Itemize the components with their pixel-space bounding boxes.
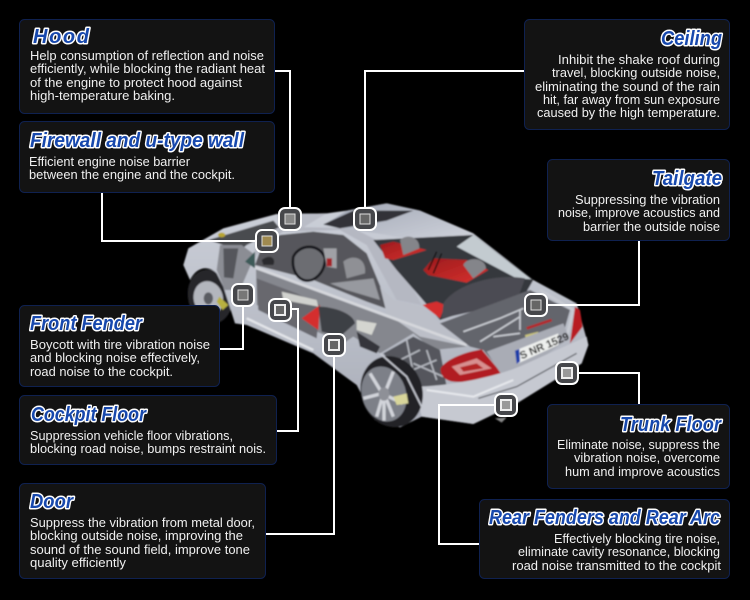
right tail light [570,307,583,343]
connector: rear fenders [439,405,495,544]
connector: tailgate [547,241,639,305]
text: tailgate description [558,192,720,234]
lower door [256,269,467,353]
text: door description: Suppress the vibration from metal door, [30,515,255,530]
text: ceiling description: travel, blocking outside noise, [552,65,720,80]
text: trunk floor description: Eliminate noise, suppress the [557,437,720,452]
text: ceiling description: eliminating the sound of the rain [535,79,720,94]
text: tailgate description: noise, improve acoustics and [558,205,720,220]
text: ceiling description: caused by the high temperature. [537,105,720,120]
text: hood description: Help consumption of reflection and noise [30,48,264,63]
text: firewall description [29,154,235,182]
text: hood description: high-temperature baking. [30,88,175,103]
text: ceiling description: hit, far away from sun exposure [543,92,720,107]
heading: hood: Hood [33,26,90,48]
text: cockpit floor description [30,428,266,456]
marker: firewall [256,230,278,252]
text: ceiling description [535,52,720,120]
text: tailgate description: barrier the outside noise [583,219,720,234]
panel: front fender [20,306,220,386]
marker: door [323,334,345,356]
text: firewall description: between the engine and the cockpit. [29,167,235,182]
windscreen frame [255,227,422,305]
text: door description: quality efficiently [30,555,126,570]
text: rear fenders description [512,531,721,573]
hood highlight [277,213,327,227]
connector: door [266,356,334,534]
text: trunk floor description [557,437,720,479]
text: trunk floor description: vibration noise, overcome [574,450,720,465]
license plate [515,333,558,364]
heading: rear fenders and rear arc: Rear Fenders and Rear Arc [489,507,720,529]
connector: cockpit floor [277,309,298,431]
text: tailgate description: Suppressing the vibration [575,192,720,207]
marker: tailgate [525,294,547,316]
text: cockpit floor description: blocking road noise, bumps restraint nois. [30,441,266,456]
connector: hood [275,71,290,208]
panel: tailgate [548,160,730,240]
text: ceiling description: Inhibit the shake roof during [558,52,720,67]
panel: door [20,484,266,578]
panel: ceiling [524,20,730,130]
text: rear fenders description: Effectively blocking tire noise, [554,531,720,546]
text: hood description: of the engine to protect hood against [30,75,242,90]
text: front fender description: and blocking noise effectively, [30,350,200,365]
panel: cockpit floor [20,396,276,464]
panel: rear fenders and rear arc [480,500,730,578]
heading: tailgate: Tailgate [652,168,722,190]
rear bumper [415,337,588,424]
text: front fender description: Boycott with tire vibration noise [30,337,210,352]
illustration: cutaway silver car: S NR 1529 [518,331,571,362]
heading: cockpit floor: Cockpit Floor [31,404,147,426]
text: rear fenders description: eliminate cavity resonance, blocking [518,544,720,559]
heading: ceiling: Ceiling [661,28,722,50]
heading: trunk floor: Trunk Floor [620,414,722,436]
marker: cockpit floor [269,299,291,321]
marker: rear fenders [495,394,517,416]
illustration: cutaway silver car [182,203,588,435]
car body shell [183,203,588,427]
sunroof [323,211,413,228]
connector: trunk floor [578,373,639,404]
text: firewall description: Efficient engine noise barrier [29,154,191,169]
connector: front fender [220,306,243,349]
exhaust tip [495,417,507,423]
heading: firewall: Firewall and u-type wall [30,130,244,152]
front wheel [182,265,238,329]
text: door description [30,515,255,570]
marker: hood [279,208,301,230]
text: trunk floor description: hum and improve acoustics [565,464,720,479]
text: hood description [30,48,265,103]
roof [323,203,473,245]
heading: door: Door [30,491,74,513]
rear suspension [383,337,447,397]
panel: firewall [20,122,274,192]
connector: ceiling [365,71,524,208]
cabin interior [255,232,390,310]
text: cockpit floor description: Suppression vehicle floor vibrations, [30,428,233,443]
text: hood description: efficiently, while blocking the radiant heat [30,61,265,76]
rear wheel [351,348,432,435]
trunk lid [487,323,569,378]
connector: firewall [102,192,256,241]
red tail light [441,349,502,382]
text: rear fenders description: road noise transmitted to the cockpit [512,558,721,573]
text: door description: blocking outside noise, improving the [30,528,243,543]
marker: ceiling [354,208,376,230]
engine bay [208,221,280,253]
text: front fender description: road noise to the cockpit. [30,364,173,379]
trunk bay [440,290,570,370]
text: door description: sound of the sound field, improve tone [30,542,250,557]
text: front fender description [30,337,210,379]
rear cabin [373,235,533,320]
heading: front fender: Front Fender [30,313,143,335]
red seats [380,242,427,260]
marker: trunk floor [556,362,578,384]
panel: trunk floor [548,404,730,488]
marker: front fender [232,284,254,306]
panel: hood [20,20,274,114]
